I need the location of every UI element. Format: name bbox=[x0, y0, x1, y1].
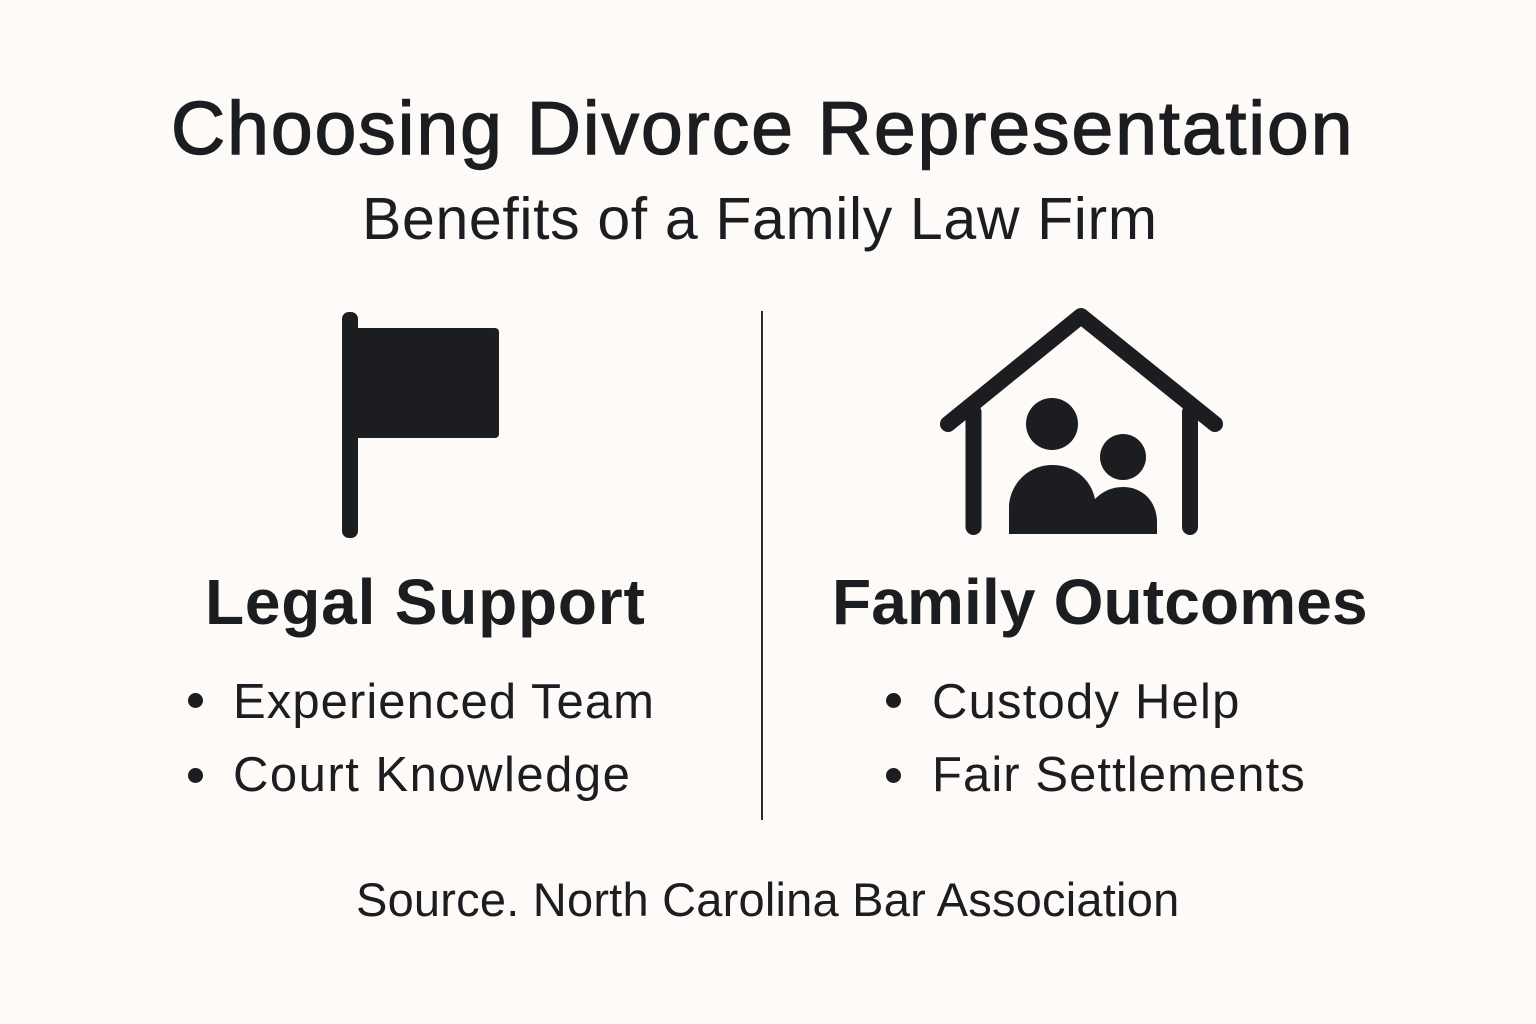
bullet bbox=[886, 693, 901, 708]
item: Experienced Team bbox=[233, 675, 655, 729]
item: Court Knowledge bbox=[233, 748, 631, 802]
icon: house with family bbox=[940, 308, 1223, 535]
source: Source. North Carolina Bar Association bbox=[356, 873, 1179, 926]
list: legal support bbox=[188, 675, 655, 802]
bullet bbox=[886, 768, 901, 783]
item: Custody Help bbox=[932, 675, 1241, 729]
bullet bbox=[188, 693, 203, 708]
list: family outcomes bbox=[886, 675, 1306, 802]
heading: legal support: Legal Support bbox=[205, 566, 646, 638]
divider bbox=[761, 311, 763, 820]
heading: family outcomes: Family Outcomes bbox=[832, 566, 1368, 638]
bullet bbox=[188, 768, 203, 783]
subtitle: Benefits of a Family Law Firm bbox=[362, 186, 1158, 252]
icon: flag bbox=[342, 312, 499, 538]
title: Choosing Divorce Representation bbox=[171, 86, 1354, 170]
item: Fair Settlements bbox=[932, 748, 1306, 802]
